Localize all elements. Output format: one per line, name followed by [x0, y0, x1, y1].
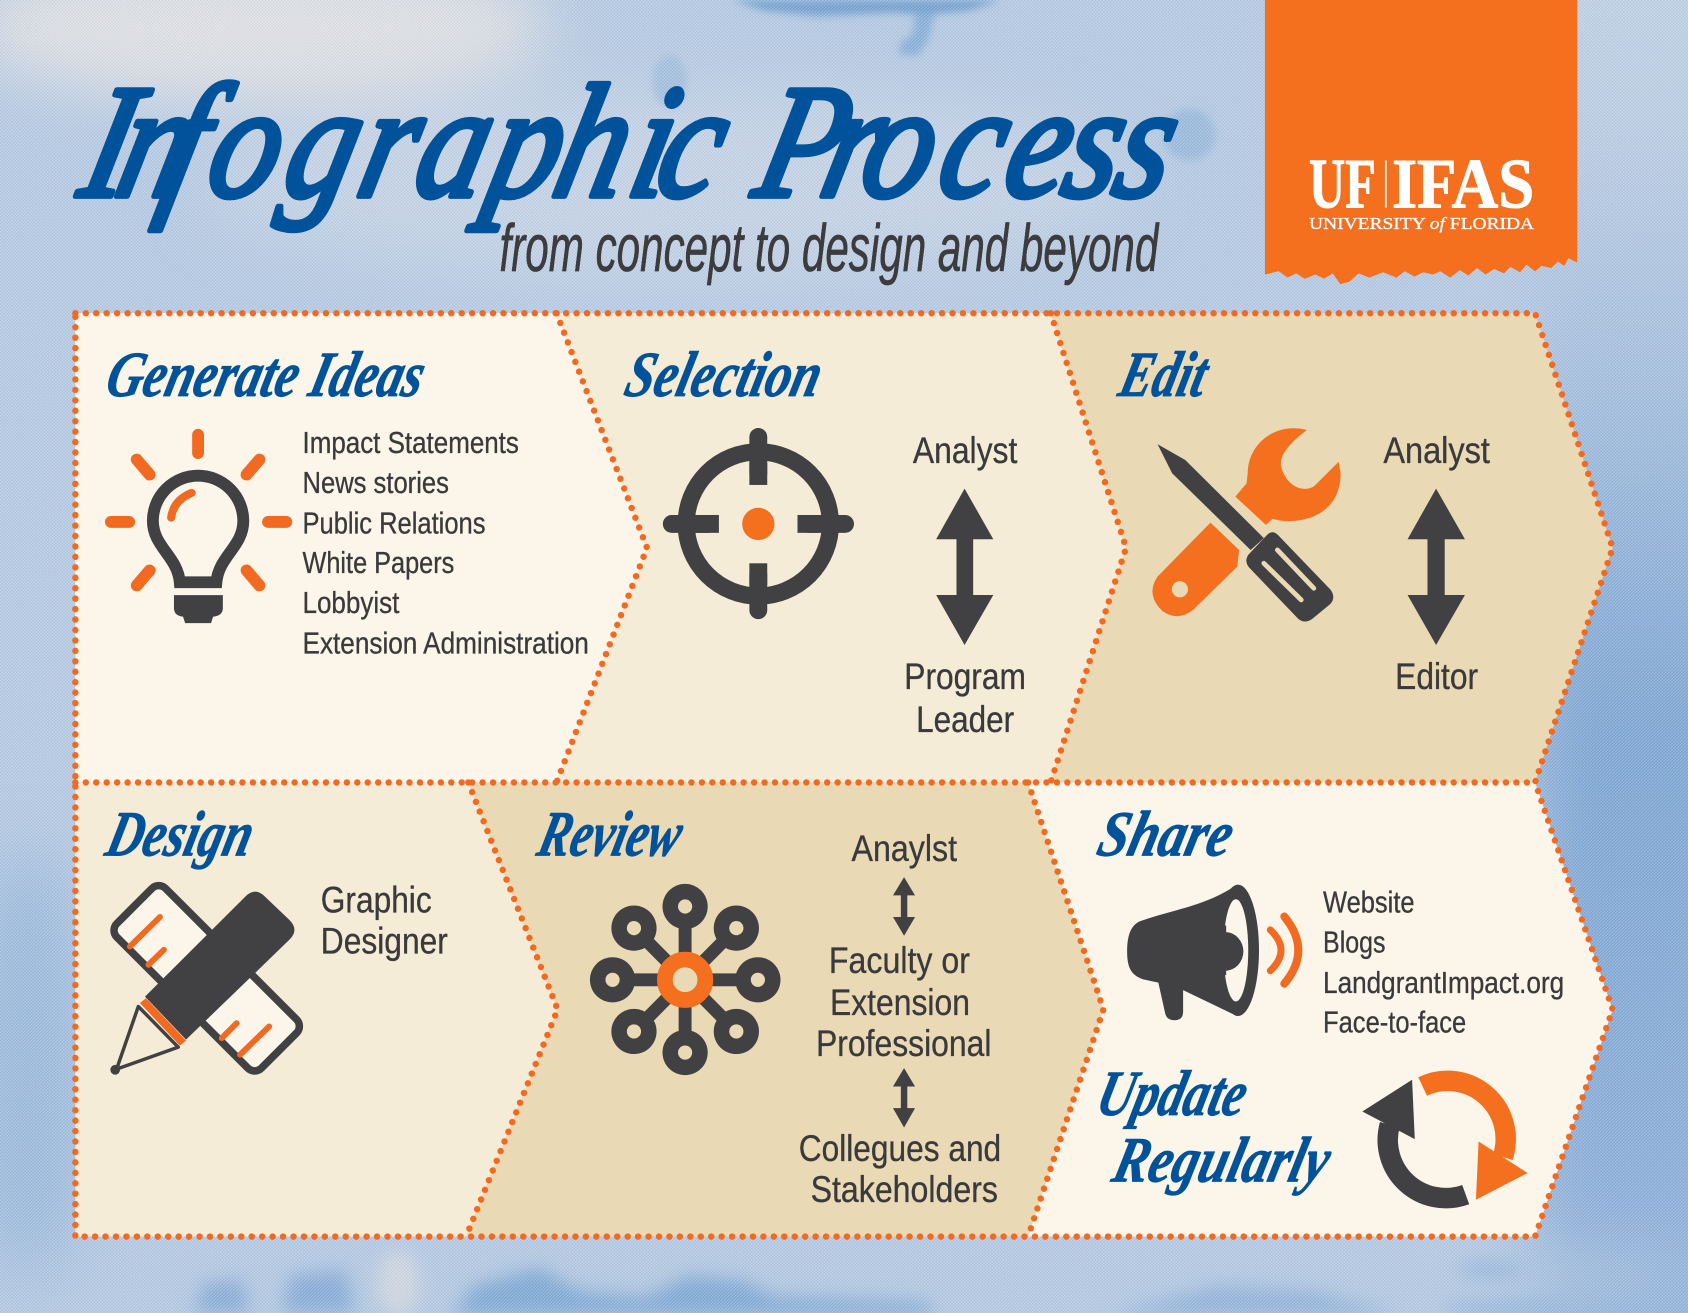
- text: program leader: [904, 656, 1026, 740]
- logo panel: UF IFAS: IFAS: [1392, 146, 1534, 224]
- list: share channels: [1323, 887, 1564, 1040]
- heading: update regularly: Update: [1090, 1059, 1255, 1130]
- heading: share: Share: [1091, 799, 1241, 870]
- text: analyst: Analyst: [913, 430, 1017, 471]
- arrow: analyst to program leader: [936, 489, 993, 645]
- title: Infographic: [67, 52, 747, 231]
- text: anaylst: Anaylst: [852, 828, 957, 869]
- list: share channels: Face-to-face: [1323, 1007, 1466, 1040]
- text: graphic designer: Designer: [321, 921, 448, 962]
- icon: network hub: [590, 884, 780, 1075]
- icon: target: [672, 437, 845, 610]
- panel: review: [466, 782, 1103, 1237]
- heading: design: Design: [99, 799, 262, 870]
- heading: selection: Selection: [619, 340, 830, 411]
- heading: review: Review: [531, 799, 690, 870]
- arrow: analyst to editor: [1408, 489, 1465, 645]
- icon: light bulb: [111, 435, 286, 623]
- text: graphic designer: [321, 880, 448, 962]
- heading: update regularly: Regularly: [1105, 1126, 1339, 1196]
- logo panel: UF IFAS: UNIVERSITY of FLORIDA: [1309, 214, 1535, 233]
- text: program leader: Leader: [916, 699, 1014, 740]
- list: sources of ideas: Extension Administration: [303, 627, 589, 660]
- text: faculty or extension professional: [816, 940, 991, 1064]
- list: share channels: LandgrantImpact.org: [1323, 967, 1564, 1000]
- list: share channels: Website: [1323, 887, 1415, 920]
- panel: share and update: [1028, 782, 1613, 1237]
- text: analyst: Analyst: [1383, 430, 1490, 471]
- logo panel: UF IFAS: [1265, 0, 1577, 284]
- icon: refresh arrows: [1362, 1080, 1528, 1200]
- icon: pencil and ruler: [110, 882, 303, 1075]
- list: sources of ideas: Public Relations: [303, 507, 486, 540]
- dotted borders around the chevrons: [75, 313, 1613, 1237]
- list: sources of ideas: News stories: [303, 467, 449, 500]
- list: sources of ideas: White Papers: [303, 547, 454, 580]
- text: collegues and stakeholders: [799, 1128, 1001, 1210]
- subtitle: from concept to design and beyond: [500, 212, 1160, 286]
- text: faculty or extension professional: Extension: [830, 982, 970, 1023]
- arrow: anaylst to faculty: [893, 877, 915, 936]
- text: graphic designer: Graphic: [321, 880, 432, 921]
- title: [67, 52, 1197, 231]
- panel: edit: [1051, 313, 1613, 782]
- text: program leader: Program: [904, 656, 1026, 697]
- panel: selection: [557, 313, 1126, 782]
- title: Process: [741, 52, 1197, 231]
- icon: wrench and screwdriver: [1152, 428, 1341, 622]
- text: faculty or extension professional: Faculty or: [829, 940, 970, 981]
- heading: update regularly: [1090, 1059, 1339, 1196]
- heading: edit: Edit: [1112, 340, 1217, 411]
- panel: design: [75, 782, 558, 1237]
- list: sources of ideas: [303, 427, 589, 660]
- heading: generate ideas: Generate Ideas: [100, 340, 433, 411]
- logo panel: UF IFAS: UF: [1309, 146, 1376, 224]
- text: editor: Editor: [1395, 656, 1478, 697]
- list: sources of ideas: Impact Statements: [303, 427, 519, 460]
- list: share channels: Blogs: [1323, 926, 1385, 959]
- text: collegues and stakeholders: Collegues and: [799, 1128, 1001, 1169]
- icon: megaphone: [1127, 885, 1298, 1020]
- panel: generate ideas: [75, 313, 647, 782]
- arrow: faculty to collegues: [893, 1068, 915, 1127]
- text: faculty or extension professional: Professional: [816, 1023, 991, 1064]
- text: collegues and stakeholders: Stakeholders: [811, 1169, 998, 1210]
- list: sources of ideas: Lobbyist: [303, 587, 400, 620]
